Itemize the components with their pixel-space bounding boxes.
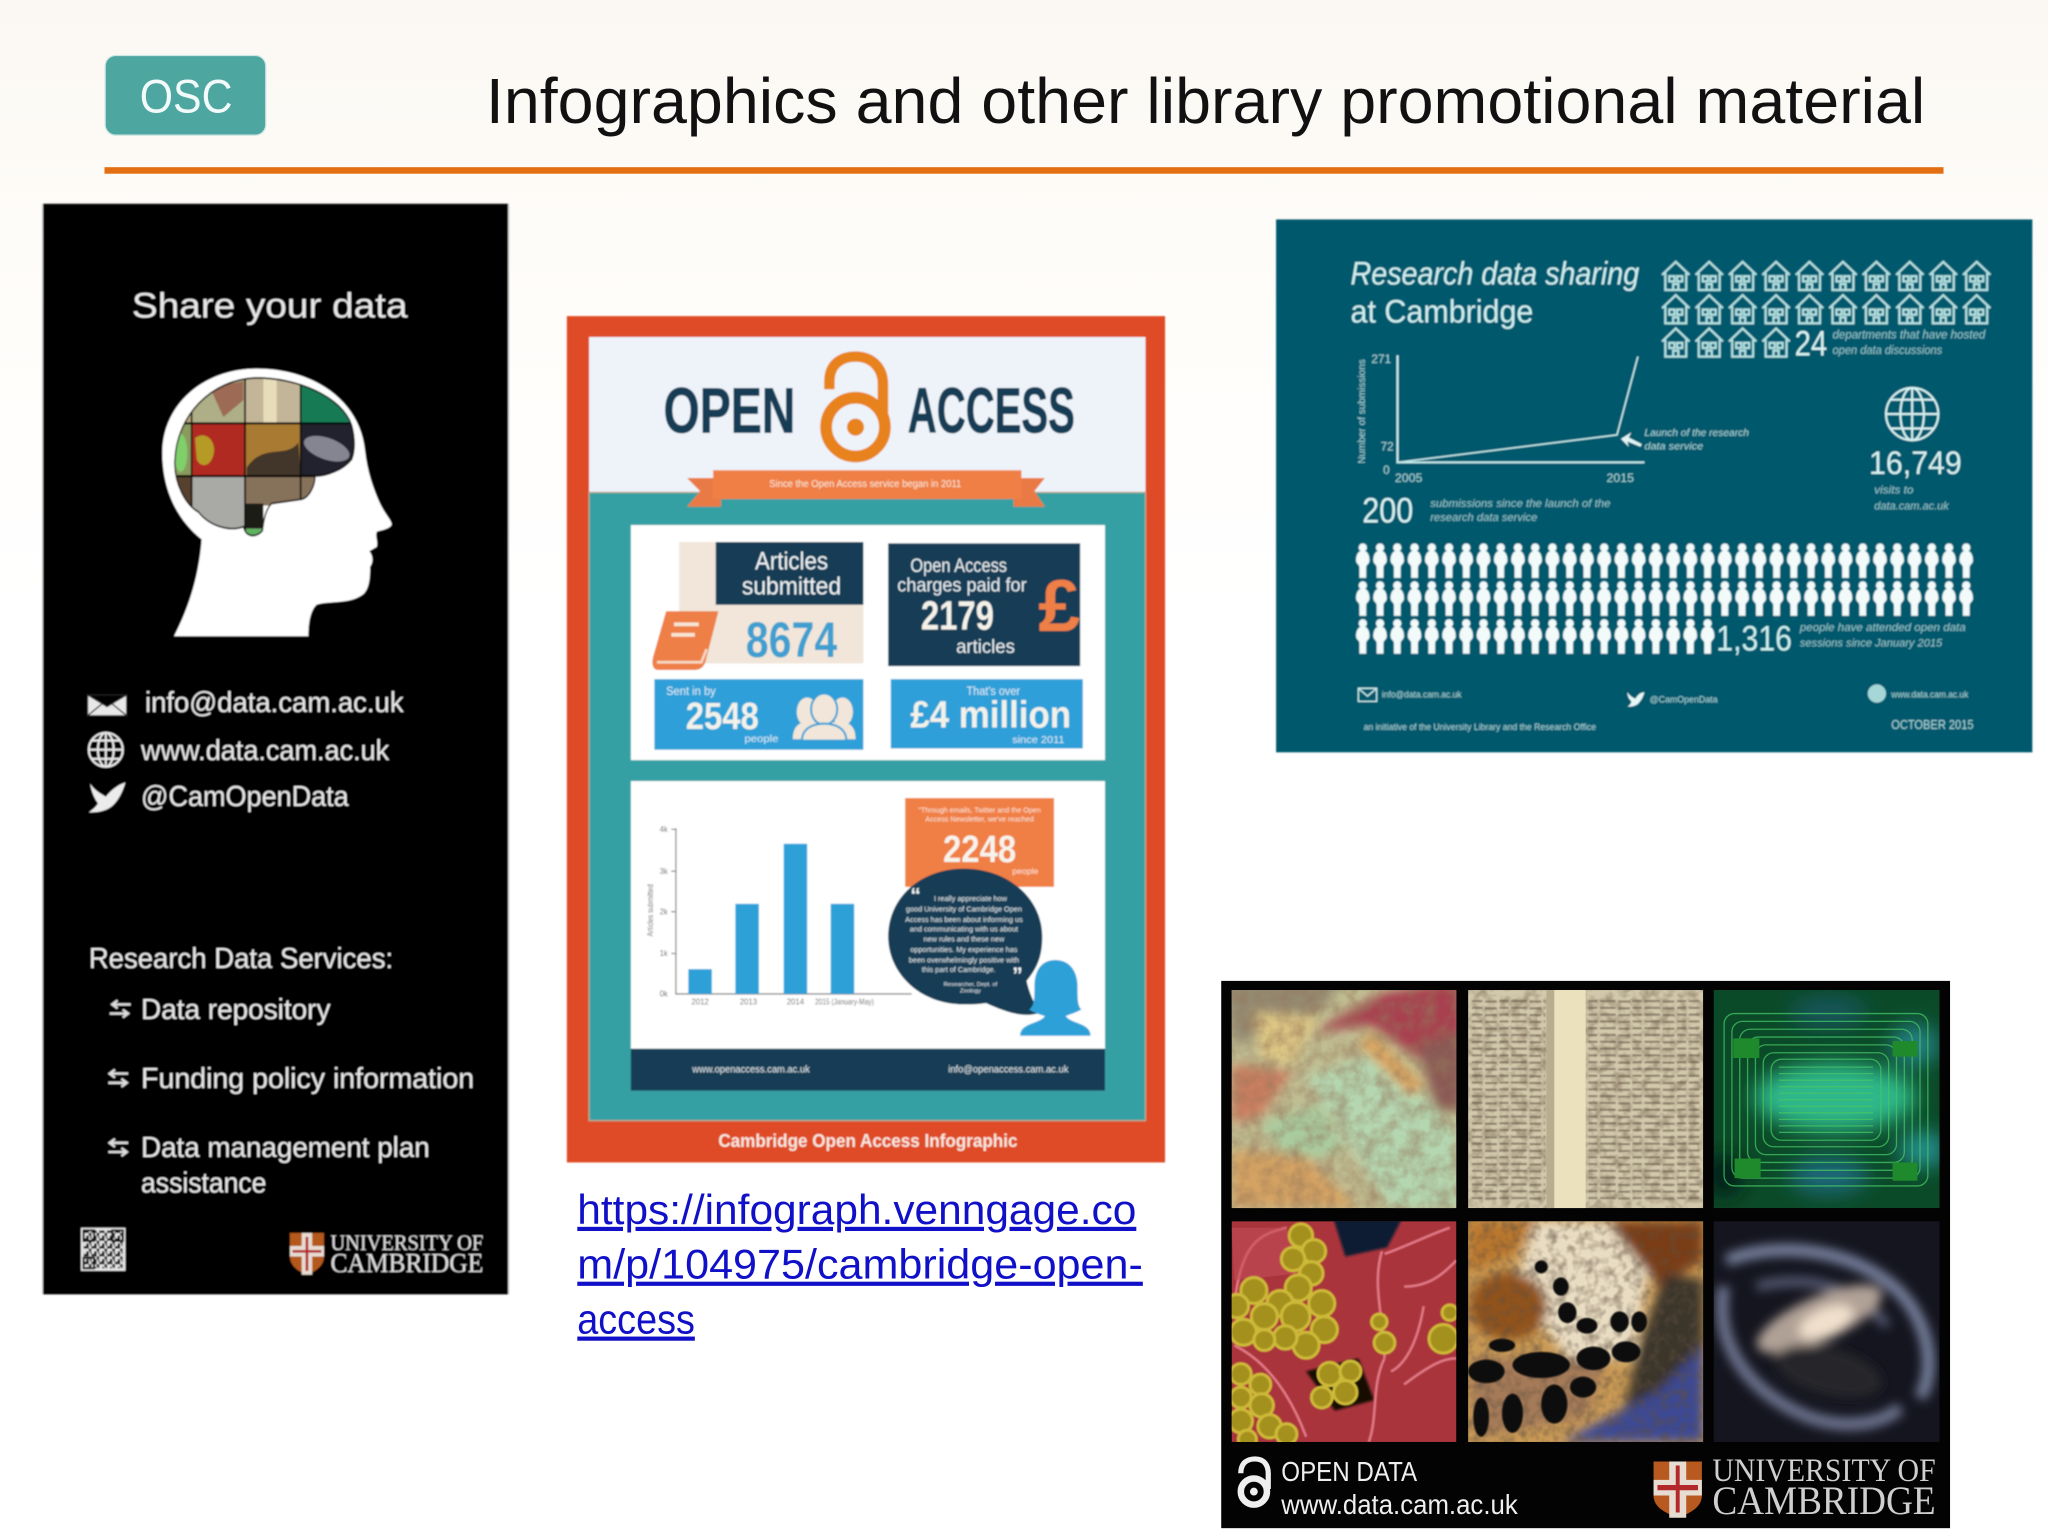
line chart: submissions: 271 [1371, 353, 1391, 366]
stat: charges paid: Open Access [910, 555, 1007, 577]
speech bubble: testimonial: new rules and these new [924, 935, 1005, 944]
pictogram: attendees: people have attended open data [1799, 622, 1966, 634]
contact: email: info@data.cam.ac.uk [145, 687, 404, 719]
stat: articles submitted: Articles [755, 548, 828, 575]
stat: visits: 16,749 [1869, 444, 1962, 481]
stat: people: Sent in by [666, 685, 716, 698]
heading: research data sharing: Research data sharing [1351, 255, 1639, 292]
stat: 200 submissions: 200 [1362, 491, 1413, 530]
banner: since 2011: Since the Open Access service began in 2011 [769, 479, 961, 490]
footer: research data contact: info@data.cam.ac.uk [1382, 689, 1462, 699]
stat: people: people [744, 734, 779, 745]
heading: share your data: Share your data [132, 286, 408, 325]
bar chart: articles submitted: 3k [660, 867, 668, 876]
line chart: submissions: 72 [1381, 441, 1394, 454]
badge: OSC [105, 56, 266, 135]
footer band: contact: info@openaccess.cam.ac.uk [948, 1064, 1069, 1075]
speech bubble: testimonial: I really appreciate how [934, 894, 1008, 903]
line chart: submissions: 2005 [1395, 472, 1423, 485]
stat: 2248 people reached: Access Newsletter, we've reached [925, 816, 1034, 824]
photo: map [1232, 990, 1456, 1208]
bar chart: articles submitted: 2015 (January-May) [815, 997, 874, 1006]
speech bubble: testimonial: Researcher, Dept. of [944, 982, 998, 988]
stat: 200 submissions: submissions since the launch of the [1430, 498, 1610, 510]
panel: share your data poster [42, 204, 509, 1294]
panel: research data sharing at Cambridge [1276, 219, 2032, 752]
pictogram: 24 departments: open data discussions [1832, 344, 1942, 357]
footer: research data contact: www.data.cam.ac.uk [1890, 689, 1969, 699]
speech bubble: testimonial: good University of Cambridge Open [906, 905, 1022, 914]
stat: articles submitted: 8674 [746, 612, 838, 668]
heading: ACCESS: ACCESS [908, 374, 1075, 446]
photo: microbes [1225, 1215, 1458, 1448]
stat: 2248 people reached: people [1012, 867, 1038, 876]
pictogram: attendees: 1,316 [1716, 619, 1792, 658]
pictogram: attendees: sessions since January 2015 [1800, 638, 1943, 650]
stat: four million [891, 679, 1083, 748]
stat: charges paid [888, 543, 1080, 666]
speech bubble: testimonial: and communicating with us about [910, 924, 1018, 933]
heading: OPEN: OPEN [664, 374, 795, 446]
icon: open access lock [826, 357, 885, 456]
bar chart: articles submitted: 2012 [691, 997, 709, 1006]
footer: research data contact: an initiative of the University Library and the Research Office [1364, 722, 1596, 732]
banner: since 2011 [687, 470, 1045, 507]
speech bubble: testimonial: opportunities. My experience has [910, 945, 1018, 954]
pictogram: 24 departments: departments that have hosted [1832, 328, 1986, 341]
contact: website: www.data.cam.ac.uk [140, 735, 390, 767]
line chart: submissions: 0 [1383, 464, 1390, 477]
badge: OSC: OSC [140, 69, 232, 122]
text: open data [1280, 1456, 1518, 1520]
line chart: submissions: 2015 [1607, 472, 1634, 485]
line chart: submissions: Number of submissions [1357, 359, 1368, 464]
stat: 2248 people reached: "Through emails, Twitter and the Open [918, 806, 1041, 814]
stat: articles submitted: submitted [742, 573, 841, 600]
stat: charges paid: £ [1038, 566, 1080, 647]
logo: University of Cambridge: CAMBRIDGE [330, 1248, 483, 1278]
line chart: submissions: data service [1644, 441, 1703, 452]
speech bubble: testimonial [888, 869, 1042, 1015]
icon: person [1020, 960, 1091, 1036]
text: open data: OPEN DATA [1281, 1456, 1418, 1487]
stat: visits: visits to [1874, 485, 1913, 497]
footer band: contact [631, 1049, 1105, 1091]
stat: charges paid: charges paid for [897, 575, 1027, 597]
speech bubble: testimonial: Zoology [960, 989, 981, 995]
list: services: Funding policy information [141, 1063, 474, 1095]
footer: research data contact: OCTOBER 2015 [1891, 717, 1974, 732]
stat: people [654, 679, 863, 750]
list: services: Data management plan [141, 1132, 430, 1164]
logo: University of Cambridge large [1654, 1453, 1936, 1523]
caption: Cambridge Open Access Infographic [718, 1130, 1017, 1151]
icon: book [652, 611, 718, 670]
stat: 200 submissions [1362, 491, 1610, 530]
logo: University of Cambridge [290, 1230, 483, 1278]
icon: people group [793, 694, 856, 741]
stat: 2248 people reached: 2248 [943, 829, 1016, 871]
stat: articles submitted [679, 542, 863, 668]
panel: chart and testimonial [631, 781, 1105, 1049]
title: Infographics and other library promotional material [486, 65, 1925, 137]
text: open data: www.data.cam.ac.uk [1280, 1489, 1518, 1520]
logo: University of Cambridge large: CAMBRIDGE [1712, 1478, 1936, 1523]
pictogram: attendees [1354, 543, 1975, 658]
list: services: assistance [141, 1167, 266, 1199]
logo: University of Cambridge: UNIVERSITY OF [330, 1230, 483, 1255]
panel: headline statistics [631, 525, 1105, 760]
stat: 200 submissions: research data service [1430, 512, 1537, 524]
heading: research data sharing: at Cambridge [1351, 293, 1533, 330]
bar chart: articles submitted: 2014 [787, 997, 805, 1006]
footer: research data contact: @CamOpenData [1650, 695, 1718, 705]
stat: four million: since 2011 [1012, 735, 1065, 746]
line chart: submissions [1357, 353, 1749, 485]
photo: fossil [1468, 1221, 1703, 1442]
pictogram: 24 departments [1661, 260, 1996, 363]
bar chart: articles submitted [646, 825, 912, 1006]
panel: Cambridge Open Access infographic [567, 316, 1165, 1162]
stat: four million: £4 million [910, 695, 1071, 737]
photo: galaxy [1714, 1221, 1940, 1442]
photo: manuscript [1468, 990, 1703, 1208]
stat: people: 2548 [686, 696, 759, 738]
pictogram: 24 departments: 24 [1795, 324, 1827, 363]
link: venngage URL: access [577, 1296, 695, 1343]
heading: research data sharing [1351, 255, 1639, 330]
header rule [104, 167, 1944, 174]
arrow: launch marker [1621, 432, 1642, 447]
bar chart: articles submitted: 2013 [740, 997, 758, 1006]
link: venngage URL: https://infograph.venngage.co [577, 1186, 1136, 1233]
stat: 2248 people reached [905, 798, 1054, 887]
contact: twitter: @CamOpenData [141, 781, 349, 813]
icon: QR code [81, 1228, 125, 1271]
stat: visits [1869, 388, 1962, 512]
line chart: submissions: Launch of the research [1644, 428, 1749, 439]
logo: University of Cambridge large: UNIVERSITY OF [1712, 1453, 1936, 1489]
stat: four million: That's over [967, 685, 1020, 698]
list: services [108, 994, 474, 1199]
speech bubble: testimonial: “ [910, 885, 921, 908]
stat: charges paid: 2179 [921, 593, 994, 639]
icon: open access lock white [1241, 1459, 1268, 1505]
bar chart: articles submitted: 4k [660, 825, 668, 834]
speech bubble: testimonial: been overwhelmingly positive with [909, 956, 1019, 965]
bar chart: articles submitted: 0k [660, 990, 668, 999]
footer band: contact: www.openaccess.cam.ac.uk [691, 1064, 810, 1075]
stat: charges paid: articles [956, 636, 1015, 658]
stat: visits: data.cam.ac.uk [1874, 500, 1950, 512]
heading: research data services: Research Data Services: [89, 943, 393, 975]
footer: research data contact [1358, 684, 1974, 732]
icon: head with brain mosaic [162, 369, 392, 636]
bar chart: articles submitted: 1k [660, 949, 668, 958]
link: venngage URL: m/p/104975/cambridge-open- [577, 1241, 1143, 1288]
photo: circuit board [1706, 990, 1946, 1208]
list: services: Data repository [141, 994, 331, 1026]
panel: open data poster [1221, 980, 1950, 1528]
bar chart: articles submitted: Articles submitted [646, 884, 655, 936]
bar chart: articles submitted: 2k [660, 907, 668, 916]
speech bubble: testimonial: ” [1012, 964, 1023, 987]
speech bubble: testimonial: this part of Cambridge. [922, 965, 996, 974]
speech bubble: testimonial: Access has been about informing us [905, 915, 1023, 924]
link: venngage URL [577, 1186, 1143, 1343]
